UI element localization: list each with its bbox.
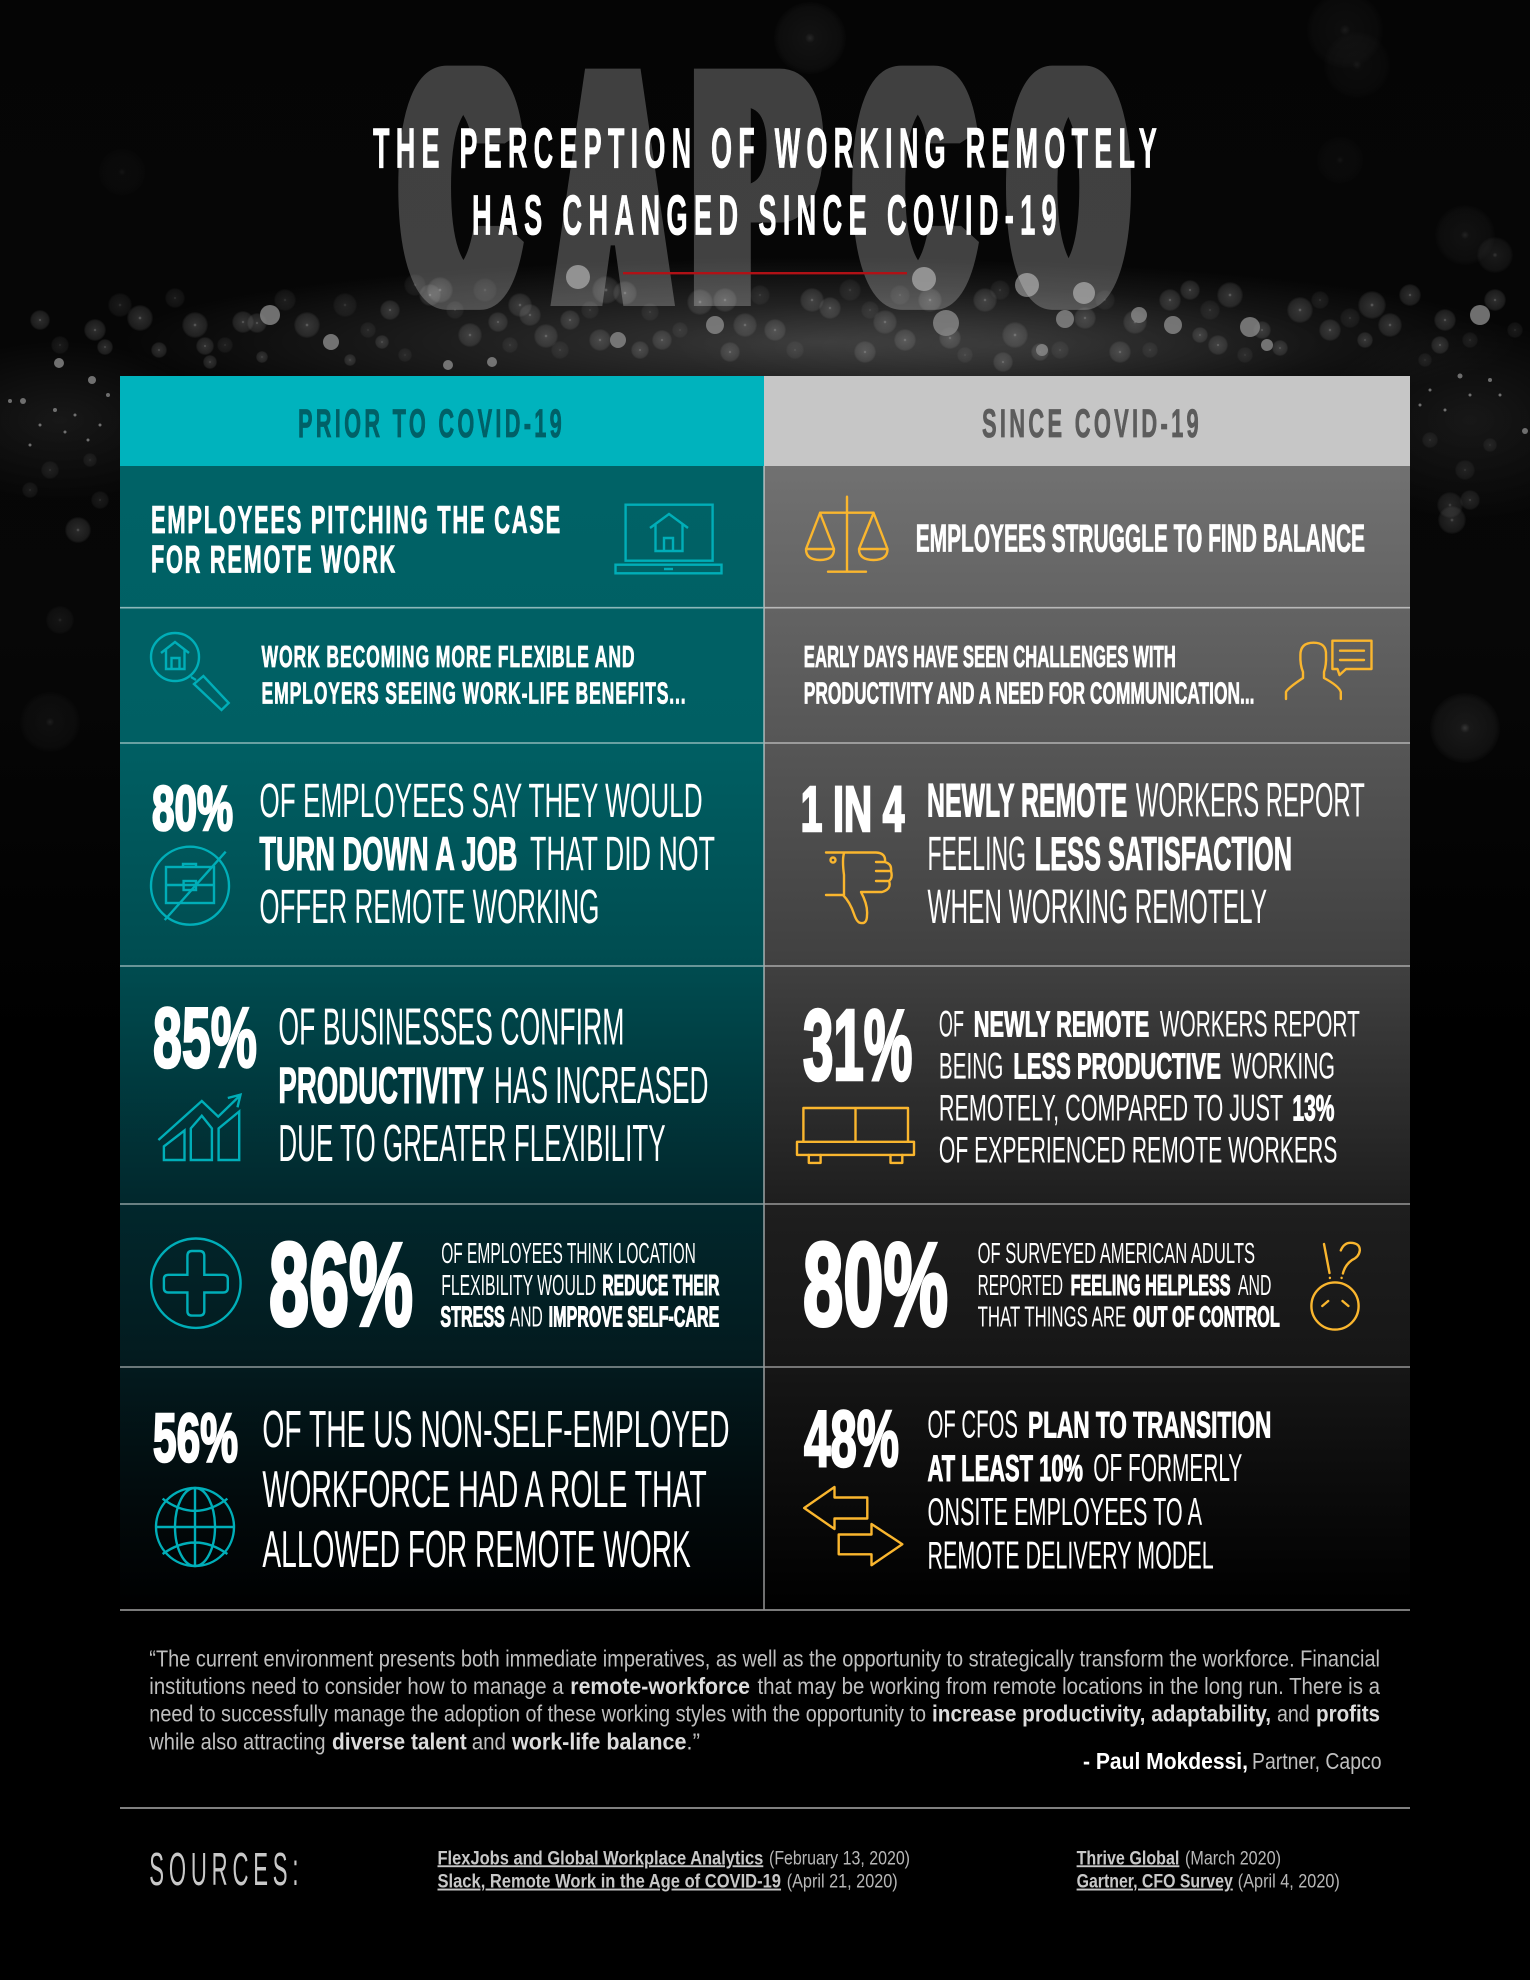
source list: left column: (April 21, 2020) xyxy=(787,1872,898,1893)
row: struggle to find balance xyxy=(806,497,1365,572)
watermark: CAPCO: O xyxy=(1016,0,1121,380)
quote: .” xyxy=(686,1728,700,1754)
row: 56% workforce: OF THE US NON-SELF-EMPLOYED xyxy=(262,1401,730,1459)
source list: right column: Gartner, CFO Survey xyxy=(1077,1872,1233,1893)
row: 31% less productive: NEWLY REMOTE xyxy=(974,1004,1149,1045)
quote: profits xyxy=(1316,1701,1380,1727)
column header: since xyxy=(764,376,1410,466)
row: 1 in 4 less satisfaction: NEWLY REMOTE xyxy=(927,774,1127,827)
source list: right column xyxy=(1077,1848,1340,1893)
row: 31% less productive: 31% xyxy=(803,990,912,1102)
row: 31% less productive: 13% xyxy=(1292,1087,1334,1128)
row: pitching the case xyxy=(151,499,722,582)
row: 31% less productive: REMOTELY, COMPARED TO JUST xyxy=(939,1087,1283,1128)
quote: that may be working from remote locations in the long run. There is a xyxy=(758,1673,1380,1699)
row: 80% turn down a job: TURN DOWN A JOB xyxy=(259,827,517,880)
source list: left column: FlexJobs and Global Workplace Analytics xyxy=(438,1848,763,1869)
row: 48% CFOs: AT LEAST 10% xyxy=(928,1447,1083,1489)
row: 85% productivity: HAS INCREASED xyxy=(494,1057,708,1115)
source list: left column: Slack, Remote Work in the Age of COVID-19 xyxy=(438,1872,781,1893)
source list: right column: (March 2020) xyxy=(1185,1848,1281,1869)
icon: crossed-out briefcase xyxy=(151,847,229,925)
quote attribution: - Paul Mokdessi, xyxy=(1083,1748,1248,1774)
watermark: CAPCO: A xyxy=(563,0,663,380)
icon: rising bar chart xyxy=(158,1095,240,1160)
quote attribution: Partner, Capco xyxy=(1252,1748,1382,1774)
row: 31% less productive: OF xyxy=(939,1004,964,1045)
row: 48% CFOs: OF CFOS xyxy=(928,1404,1018,1447)
quote: remote-workforce xyxy=(570,1673,750,1699)
row: 48% CFOs: REMOTE DELIVERY MODEL xyxy=(928,1535,1214,1578)
source list: right column: Thrive Global xyxy=(1077,1848,1179,1869)
row: pitching the case: FOR REMOTE WORK xyxy=(151,538,397,582)
row: 86% stress: STRESS xyxy=(440,1302,505,1334)
quote: need to successfully manage the adoption of these working styles with the opportunity to xyxy=(149,1701,926,1727)
watermark: CAPCO: C xyxy=(408,0,512,380)
row: 80% helpless: THAT THINGS ARE xyxy=(978,1302,1126,1334)
row: 86% stress: FLEXIBILITY WOULD xyxy=(441,1270,596,1302)
row: 56% workforce: WORKFORCE HAD A ROLE THAT xyxy=(262,1461,707,1519)
quote: diverse talent xyxy=(332,1728,467,1754)
row: 48% CFOs: PLAN TO TRANSITION xyxy=(1028,1404,1271,1446)
row: 56% workforce: 56% xyxy=(153,1400,238,1476)
watermark: CAPCO xyxy=(408,0,1121,381)
quote: institutions need to consider how to manage a xyxy=(149,1673,564,1699)
panel: prior to COVID-19 xyxy=(120,376,764,1610)
row: 56% workforce: ALLOWED FOR REMOTE WORK xyxy=(262,1521,691,1579)
row: 80% turn down a job: OF EMPLOYEES SAY THEY WOULD xyxy=(259,775,703,828)
icon: laptop with house xyxy=(616,505,722,573)
icon: person with speech bubble xyxy=(1286,641,1372,699)
sources xyxy=(149,1843,1340,1895)
row: 86% stress: OF EMPLOYEES THINK LOCATION xyxy=(441,1238,696,1270)
row: 80% turn down a job: 80% xyxy=(152,774,233,844)
row: 1 in 4 less satisfaction xyxy=(801,773,1365,934)
row: early days challenges xyxy=(804,640,1372,710)
row: 1 in 4 less satisfaction: FEELING xyxy=(928,828,1026,881)
row: 85% productivity: 85% xyxy=(153,991,257,1086)
column header: since: SINCE COVID-19 xyxy=(982,402,1202,446)
icon: confused face xyxy=(1311,1243,1360,1330)
panel: since COVID-19 xyxy=(764,376,1410,1610)
quote: while also attracting xyxy=(148,1728,326,1754)
row: 86% stress: 86% xyxy=(269,1219,413,1351)
title xyxy=(373,116,1163,248)
quote: increase productivity, adaptability, xyxy=(932,1701,1271,1727)
row: 86% stress: REDUCE THEIR xyxy=(602,1270,719,1302)
row: 80% helpless: FEELING HELPLESS xyxy=(1071,1270,1230,1302)
row: early days challenges: EARLY DAYS HAVE SEEN CHALLENGES WITH xyxy=(804,640,1176,674)
source list: right column: (April 4, 2020) xyxy=(1238,1872,1340,1893)
row: work becoming more flexible xyxy=(151,633,686,710)
row: 80% turn down a job xyxy=(151,774,715,934)
row: 85% productivity: PRODUCTIVITY xyxy=(278,1057,484,1114)
row: 80% turn down a job: OFFER REMOTE WORKING xyxy=(259,881,599,934)
icon: balance scale xyxy=(806,497,888,572)
watermark: CAPCO: C xyxy=(862,0,967,381)
row: 80% helpless: REPORTED xyxy=(978,1270,1063,1302)
row: 86% stress: AND xyxy=(510,1302,543,1334)
quote xyxy=(148,1646,1381,1774)
quote: “The current environment presents both immediate imperatives, as well as the opportunity to strategically transform the workforce. Financial xyxy=(149,1646,1380,1672)
row: work becoming more flexible: EMPLOYERS SEEING WORK-LIFE BENEFITS... xyxy=(262,676,686,710)
row: 85% productivity xyxy=(153,991,708,1173)
row: 31% less productive xyxy=(797,990,1360,1170)
row: 48% CFOs: 48% xyxy=(804,1394,899,1483)
row: 1 in 4 less satisfaction: 1 IN 4 xyxy=(801,773,905,845)
row: 86% stress: IMPROVE SELF-CARE xyxy=(549,1302,719,1334)
sources: SOURCES: xyxy=(149,1843,303,1895)
column header: prior xyxy=(120,376,764,466)
source list: left column xyxy=(438,1848,910,1893)
icon: globe xyxy=(156,1488,234,1566)
row: 1 in 4 less satisfaction: LESS SATISFACTION xyxy=(1035,827,1292,880)
row: 48% CFOs: OF FORMERLY xyxy=(1093,1447,1242,1490)
row: 56% workforce xyxy=(153,1400,730,1579)
quote: and xyxy=(472,1728,506,1754)
row: 85% productivity: DUE TO GREATER FLEXIBILITY xyxy=(278,1115,666,1173)
row: 85% productivity: OF BUSINESSES CONFIRM xyxy=(278,999,624,1057)
icon: transition arrows xyxy=(804,1487,902,1565)
quote attribution xyxy=(1083,1748,1382,1774)
row: 48% CFOs xyxy=(804,1394,1271,1578)
row: pitching the case: EMPLOYEES PITCHING THE CASE xyxy=(151,499,562,542)
icon: couch xyxy=(797,1108,914,1163)
icon: magnifier on house xyxy=(151,633,229,710)
row: 31% less productive: LESS PRODUCTIVE xyxy=(1013,1046,1221,1087)
row: 31% less productive: WORKING xyxy=(1231,1046,1335,1087)
row: 31% less productive: WORKERS REPORT xyxy=(1160,1004,1360,1045)
row: 80% helpless: 80% xyxy=(803,1219,948,1351)
column header: prior: PRIOR TO COVID-19 xyxy=(298,402,565,446)
row: 48% CFOs: ONSITE EMPLOYEES TO A xyxy=(928,1491,1202,1534)
row: 80% helpless: OUT OF CONTROL xyxy=(1133,1302,1280,1334)
icon: thumbs down xyxy=(826,852,892,923)
row: 80% helpless: AND xyxy=(1238,1270,1271,1302)
row: 80% turn down a job: THAT DID NOT xyxy=(530,828,715,881)
row: 31% less productive: BEING xyxy=(939,1046,1003,1087)
row: 80% helpless xyxy=(803,1219,1360,1351)
icon: medical cross xyxy=(151,1238,241,1328)
source list: left column: (February 13, 2020) xyxy=(769,1848,910,1869)
row: 80% helpless: OF SURVEYED AMERICAN ADULTS xyxy=(978,1238,1255,1270)
quote: and xyxy=(1277,1701,1310,1727)
row: 86% stress xyxy=(151,1219,719,1351)
watermark: CAPCO: P xyxy=(698,0,813,379)
quote: work-life balance xyxy=(511,1728,686,1754)
row: work becoming more flexible: WORK BECOMING MORE FLEXIBLE AND xyxy=(262,640,636,674)
